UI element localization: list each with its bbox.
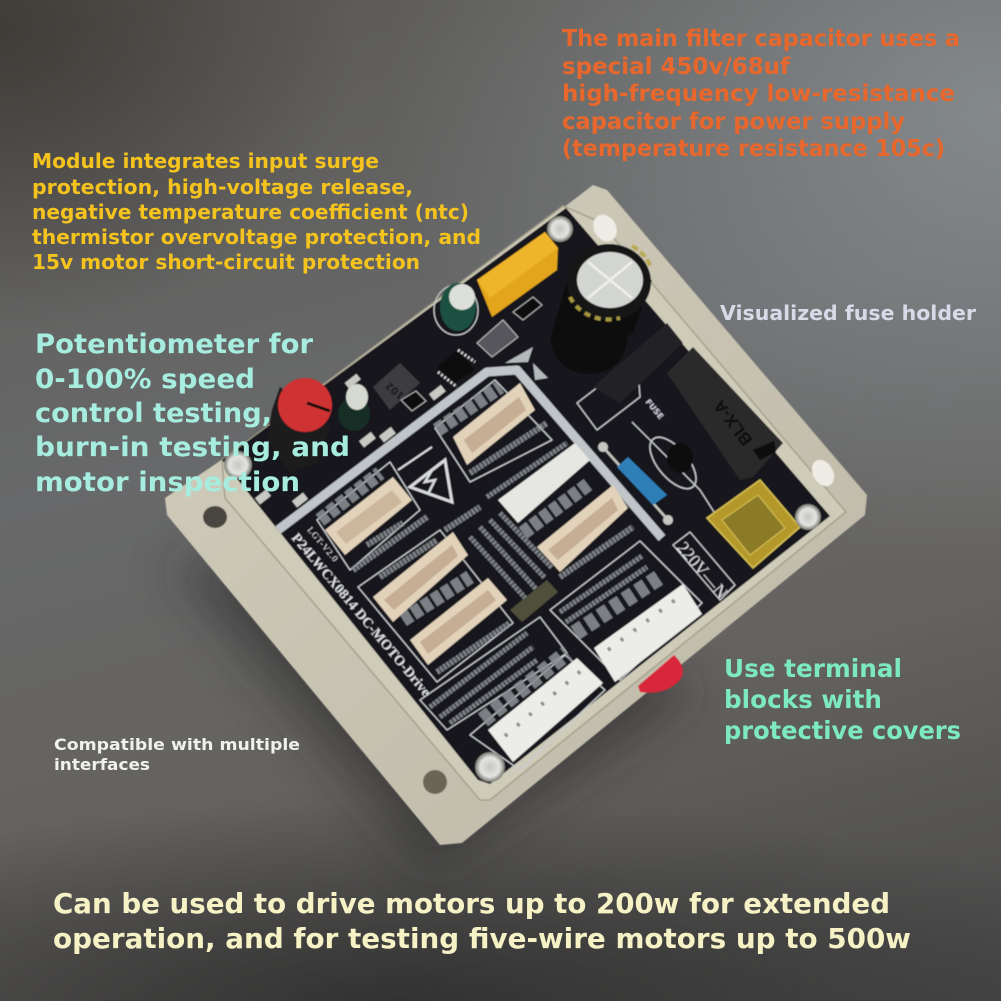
white connector upper bbox=[498, 443, 590, 523]
footer statement: Can be used to drive motors up to 200w for extended bbox=[53, 887, 890, 920]
footer statement: operation, and for testing five-wire motors up to 500w bbox=[53, 922, 911, 955]
beige connector top bbox=[453, 383, 535, 465]
beige connector lower bbox=[410, 578, 507, 665]
screw left bbox=[224, 451, 252, 479]
callout: potentiometer: burn-in testing, and bbox=[35, 432, 350, 463]
grey silkscreen border bbox=[278, 370, 662, 538]
yellow X capacitor bbox=[477, 232, 558, 317]
callout: module protections: Module integrates input surge bbox=[32, 149, 379, 173]
callout: potentiometer: control testing, bbox=[35, 398, 272, 429]
board version text: LGT-V2.0 bbox=[305, 525, 340, 564]
callout: terminal blocks: blocks with bbox=[724, 685, 882, 714]
callout: interfaces: interfaces bbox=[54, 755, 150, 774]
thin board outlines bbox=[317, 357, 735, 770]
callout: main filter capacitor: capacitor for power supply bbox=[562, 109, 905, 135]
ESD triangle icon bbox=[505, 347, 548, 380]
screw bottom bbox=[475, 752, 505, 782]
enclosure ledge bbox=[222, 206, 846, 800]
board voltage text: 220V—N bbox=[673, 538, 732, 603]
callout: module protections: negative temperature coefficient (ntc) bbox=[32, 200, 469, 224]
connector pin labels and silkscreen rows bbox=[320, 387, 660, 723]
beige enclosure bbox=[165, 185, 867, 845]
callout: main filter capacitor: special 450v/68uf bbox=[562, 54, 791, 80]
blue resistor bbox=[598, 442, 673, 525]
mounting hole top bbox=[588, 210, 622, 246]
beige connector right bbox=[537, 485, 628, 572]
board model text: P24LWCX0814 DC-MOTO-Drive bbox=[288, 531, 433, 700]
callout: terminal blocks bbox=[724, 654, 961, 745]
inductor 102: 102 bbox=[384, 379, 407, 401]
black fuse holder bbox=[593, 323, 783, 480]
callout: main filter capacitor: The main filter capacitor uses a bbox=[562, 26, 960, 52]
callout: main filter capacitor bbox=[562, 26, 960, 162]
callout: potentiometer bbox=[35, 329, 350, 498]
inductor 102 bbox=[373, 363, 420, 410]
callout: module protections bbox=[32, 149, 481, 274]
NTC thermistor outline: FUSE bbox=[643, 398, 665, 421]
small capacitor by knob bbox=[338, 384, 370, 431]
callout: potentiometer: 0-100% speed bbox=[35, 364, 255, 395]
callout: terminal blocks: Use terminal bbox=[724, 654, 902, 683]
NTC thermistor outline bbox=[642, 398, 704, 496]
callout: module protections: thermistor overvoltage protection, and bbox=[32, 225, 481, 249]
screw top bbox=[547, 216, 573, 242]
callout: fuse holder: Visualized fuse holder bbox=[720, 301, 976, 325]
mounting hole right bbox=[807, 456, 839, 490]
inductor upper bbox=[477, 320, 518, 357]
small green capacitor bbox=[434, 283, 478, 335]
callout: terminal blocks: protective covers bbox=[724, 716, 961, 745]
callout: potentiometer: Potentiometer for bbox=[35, 329, 314, 360]
potentiometer knob bbox=[267, 378, 332, 473]
mounting hole left bbox=[203, 506, 227, 528]
IC chip bbox=[437, 350, 475, 387]
callout: module protections: protection, high-voltage release, bbox=[32, 175, 413, 199]
product photo: motor driver board bbox=[165, 185, 867, 845]
footer statement bbox=[53, 887, 911, 955]
callout: interfaces: Compatible with multiple bbox=[54, 735, 300, 754]
white terminal block right bbox=[594, 584, 702, 682]
screw right bbox=[795, 504, 821, 530]
black circuit board bbox=[222, 208, 830, 784]
mounting hole bottom bbox=[423, 770, 447, 794]
small SMD parts bbox=[255, 297, 542, 507]
enclosure shadow bbox=[170, 560, 700, 870]
olive LCD block bbox=[510, 580, 558, 622]
callout: main filter capacitor: (temperature resistance 105c) bbox=[562, 136, 945, 162]
callout: potentiometer: motor inspection bbox=[35, 467, 300, 498]
warning triangle icon bbox=[398, 447, 452, 502]
beige connector left bbox=[325, 477, 412, 555]
beige connector middle bbox=[373, 532, 468, 622]
callout: module protections: 15v motor short-circuit protection bbox=[32, 250, 420, 274]
red tab bbox=[638, 655, 683, 693]
callout: interfaces bbox=[54, 735, 300, 774]
main filter capacitor bbox=[550, 244, 652, 374]
yellow blade fuse bbox=[707, 480, 800, 568]
black fuse holder: BLX-A bbox=[710, 396, 756, 449]
callout: main filter capacitor: high-frequency low-resistance bbox=[562, 81, 955, 107]
white terminal block lower bbox=[488, 658, 603, 762]
